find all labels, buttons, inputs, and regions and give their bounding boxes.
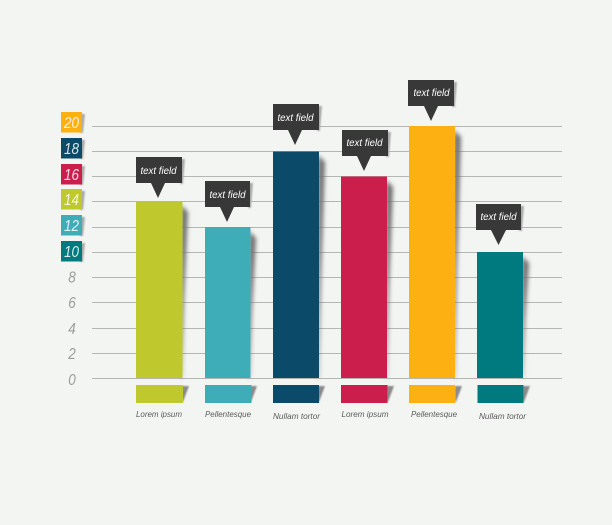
callout: bar 1 — [136, 157, 185, 198]
category labels: Pellentesque — [205, 409, 251, 419]
y axis badges and labels — [61, 112, 85, 389]
callout: bar 3 — [273, 104, 322, 145]
y axis badges and labels: 4 — [68, 321, 76, 338]
callout: bar 1: text field — [140, 166, 177, 177]
y axis badges and labels: 8 — [68, 270, 76, 286]
y axis badges and labels: 12 — [64, 218, 79, 235]
y axis badges and labels: 10 — [64, 244, 79, 261]
y axis badges and labels: 2 — [67, 346, 76, 363]
bar 4: Lorem ipsum, value 16 — [341, 176, 394, 403]
category labels: Pellentesque — [411, 409, 457, 419]
bar 2: Pellentesque, value 12 — [205, 227, 257, 403]
category labels — [136, 409, 527, 421]
y axis badges and labels: 6 — [68, 295, 76, 312]
category labels: Nullam tortor — [479, 411, 527, 421]
category labels: Lorem ipsum — [136, 409, 182, 419]
callout: bar 6: text field — [480, 212, 517, 223]
callout: bar 3: text field — [278, 113, 314, 124]
y axis badges and labels: 14 — [64, 192, 79, 209]
category labels: Nullam tortor — [273, 411, 321, 421]
callout: bar 2 — [205, 181, 253, 222]
bar 5: Pellentesque, value 20 — [409, 126, 462, 403]
category labels: Lorem ipsum — [342, 409, 388, 419]
y axis badges and labels: 18 — [64, 141, 79, 158]
y axis badges and labels: 0 — [68, 372, 76, 389]
callout: bar 6 — [476, 204, 524, 245]
callout: bar 4: text field — [346, 138, 383, 149]
bar 6: Nullam tortor, value 10 — [477, 252, 530, 403]
y axis badges and labels: 16 — [64, 167, 79, 184]
callout: bar 5 — [408, 80, 457, 121]
callout: bar 4 — [342, 130, 391, 171]
callout: bar 5: text field — [414, 88, 450, 99]
bar 3: Nullam tortor, value 18 — [273, 152, 325, 403]
y axis badges and labels: 20 — [63, 115, 79, 132]
bar 1: Lorem ipsum, value 14 — [136, 202, 189, 403]
callout: bar 2: text field — [210, 190, 246, 201]
